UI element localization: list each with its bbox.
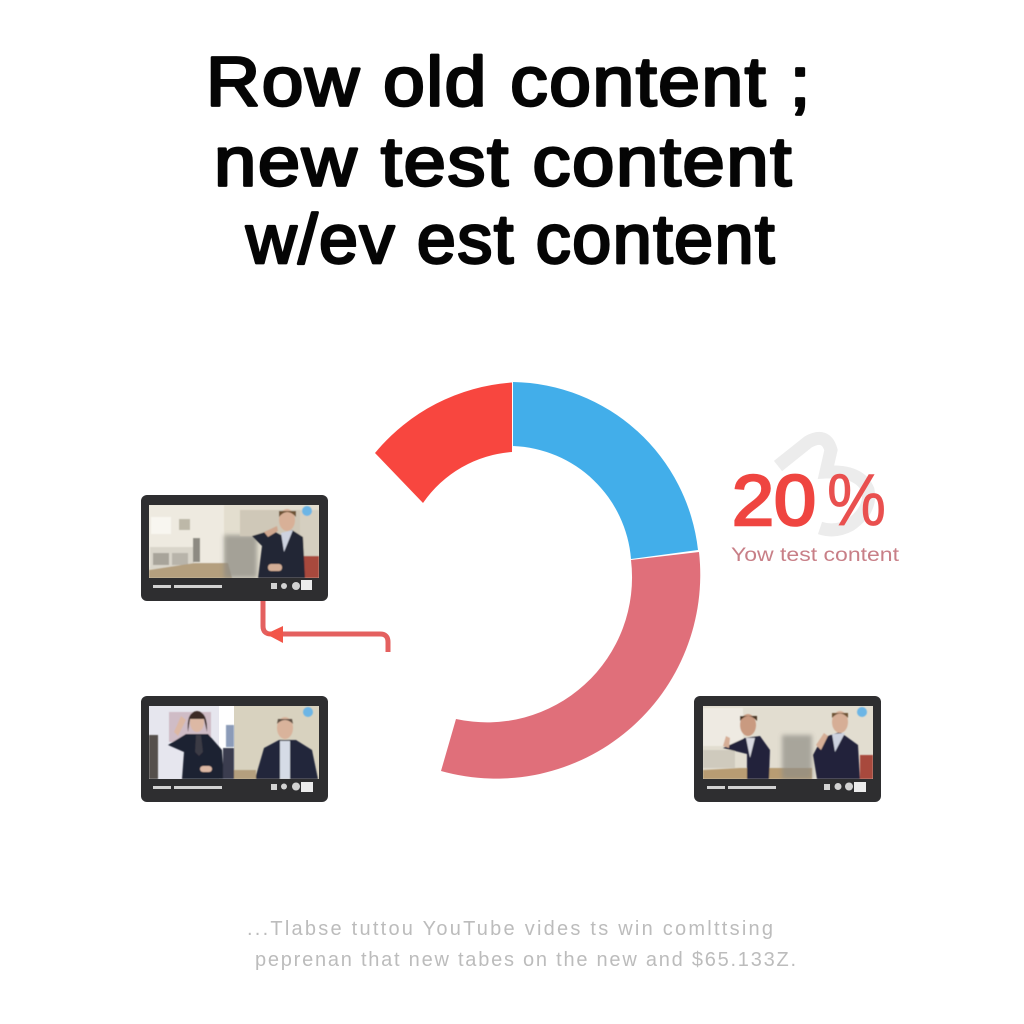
donut chart	[375, 382, 700, 779]
title: new test content	[214, 122, 793, 200]
pink segment	[441, 552, 700, 779]
footer text	[247, 918, 796, 971]
footer text: ...Tlabse tuttou YouTube vides ts win comlttsing	[247, 918, 773, 940]
arrow head	[266, 626, 283, 643]
title: w/ev est content	[245, 200, 776, 278]
footer text: peprenan that new tabes on the new and $65.133Z.	[255, 949, 796, 971]
title: Row old content ;	[206, 42, 812, 120]
video thumbnail: bottom right	[694, 696, 881, 802]
video thumbnail: top left	[141, 495, 328, 601]
arrow line	[263, 601, 388, 652]
percentage sign: %	[827, 460, 886, 541]
video thumbnail: bottom left	[141, 696, 328, 802]
blue segment	[513, 382, 698, 559]
title	[206, 42, 812, 278]
player controls	[707, 782, 866, 792]
player controls	[153, 580, 312, 590]
caption: Yow test content	[731, 545, 900, 566]
player controls	[153, 782, 313, 792]
callout: 20 percent	[731, 438, 900, 566]
watermark glyph	[778, 438, 869, 530]
arrow	[263, 601, 388, 652]
percentage number: 20	[732, 462, 816, 541]
red segment	[375, 382, 512, 503]
